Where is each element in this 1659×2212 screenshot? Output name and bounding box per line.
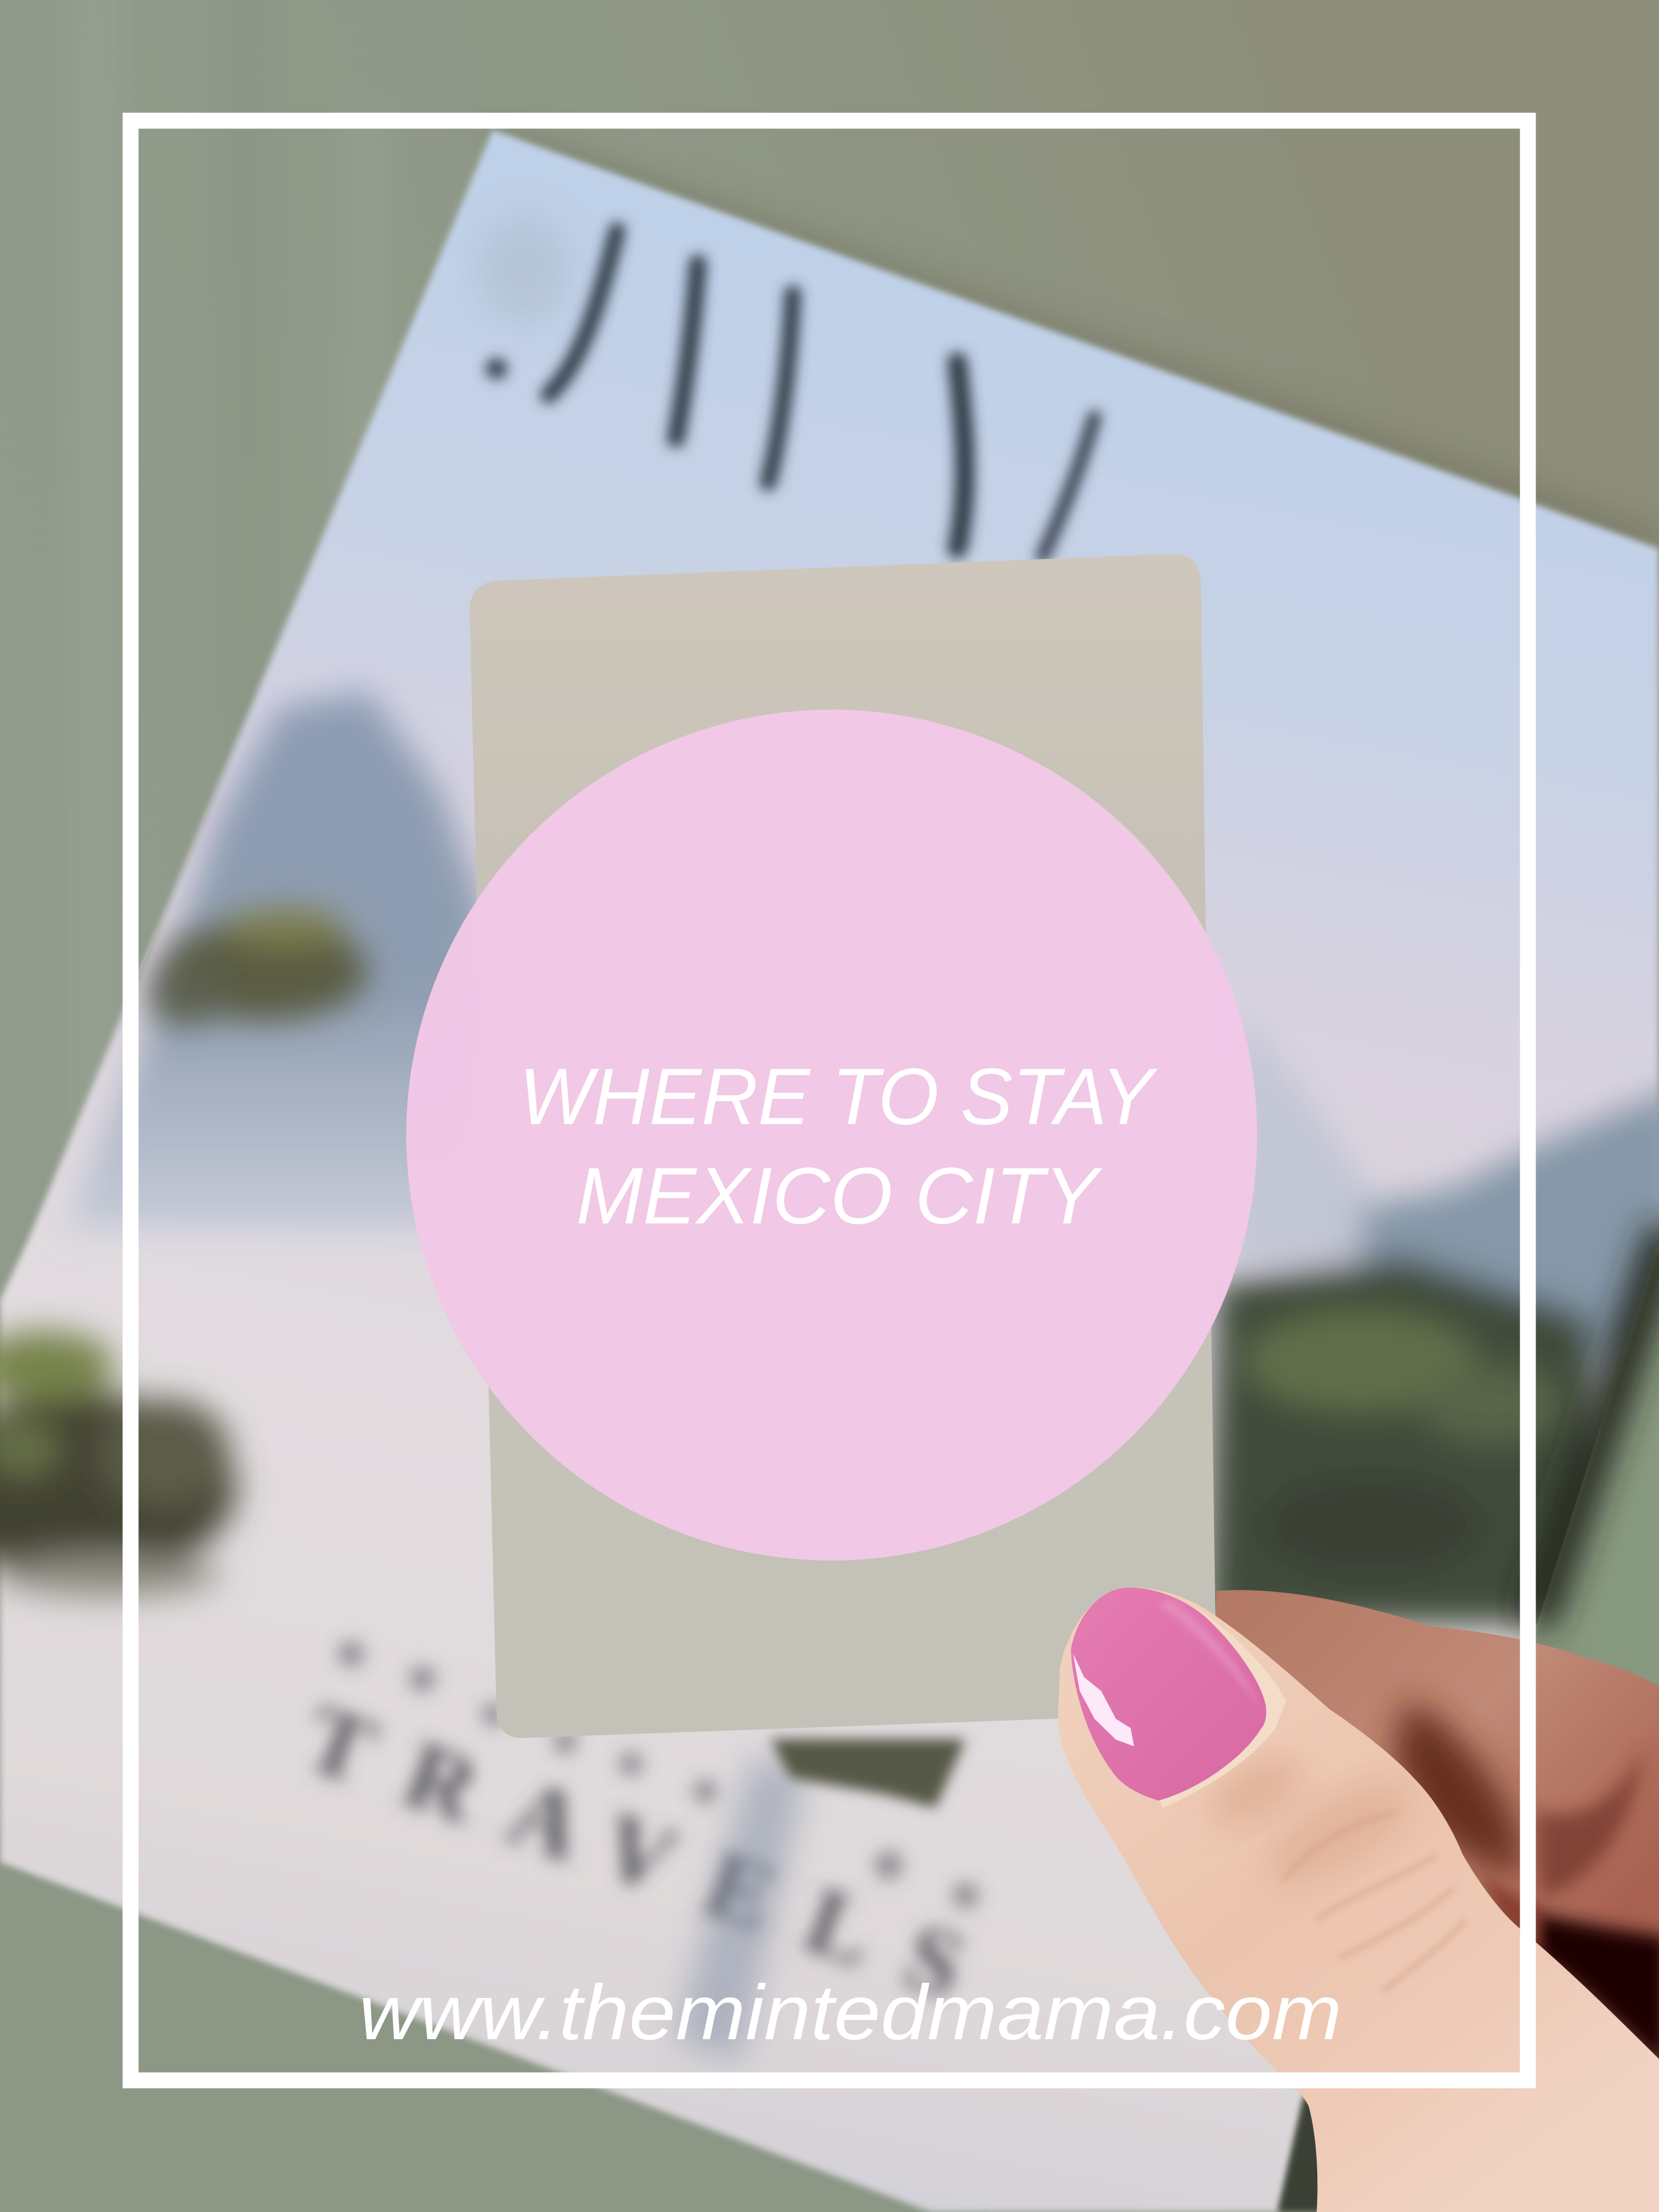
card shadow — [771, 1739, 966, 1808]
index finger — [1216, 1590, 1659, 2085]
right mountain and trees — [1207, 1009, 1659, 1624]
faint logo smudge — [477, 214, 571, 324]
lower table tone — [0, 1810, 988, 2212]
magazine shadow — [472, 115, 1659, 592]
dark sliver beside thumb — [1278, 2097, 1328, 2212]
blue streak reflection — [675, 1756, 806, 2063]
thumb knuckle wrinkles — [1283, 1812, 1465, 1991]
cuticle — [1159, 1605, 1286, 1808]
pink circle — [406, 710, 1257, 1560]
title: where to stay mexico city: WHERE TO STAY — [519, 1052, 1158, 1141]
deep shadow between fingers — [1525, 1912, 1659, 2074]
left island trees — [148, 908, 368, 1026]
thumb — [1058, 1588, 1659, 2212]
blurred TRAVELS cover line: TRAVELS — [292, 1683, 978, 2020]
blank key card — [470, 554, 1216, 1738]
thumb-side red shadow — [1481, 1876, 1542, 1953]
bottom-left trees — [0, 1330, 236, 1596]
right-hand magazine edge strip — [1536, 1240, 1659, 1712]
nail gloss band — [1158, 1599, 1259, 1706]
thumb warm shading — [1201, 1745, 1311, 1837]
magazine masthead letters — [486, 230, 1094, 557]
title: where to stay mexico city — [519, 1052, 1158, 1240]
website url: www.themintedmama.com — [359, 1969, 1342, 2056]
dark magazine spine edge — [1536, 1229, 1659, 1624]
lower finger shadow — [1536, 1745, 1646, 1898]
title: where to stay mexico city: MEXICO CITY — [576, 1151, 1103, 1240]
pink nail — [1071, 1588, 1266, 1801]
nail highlight — [1073, 1654, 1134, 1746]
left mountain — [66, 691, 483, 1229]
thumb knuckle shading — [1251, 1763, 1426, 1902]
white frame — [131, 121, 1528, 2080]
finger shadow crease — [1395, 1701, 1521, 1876]
